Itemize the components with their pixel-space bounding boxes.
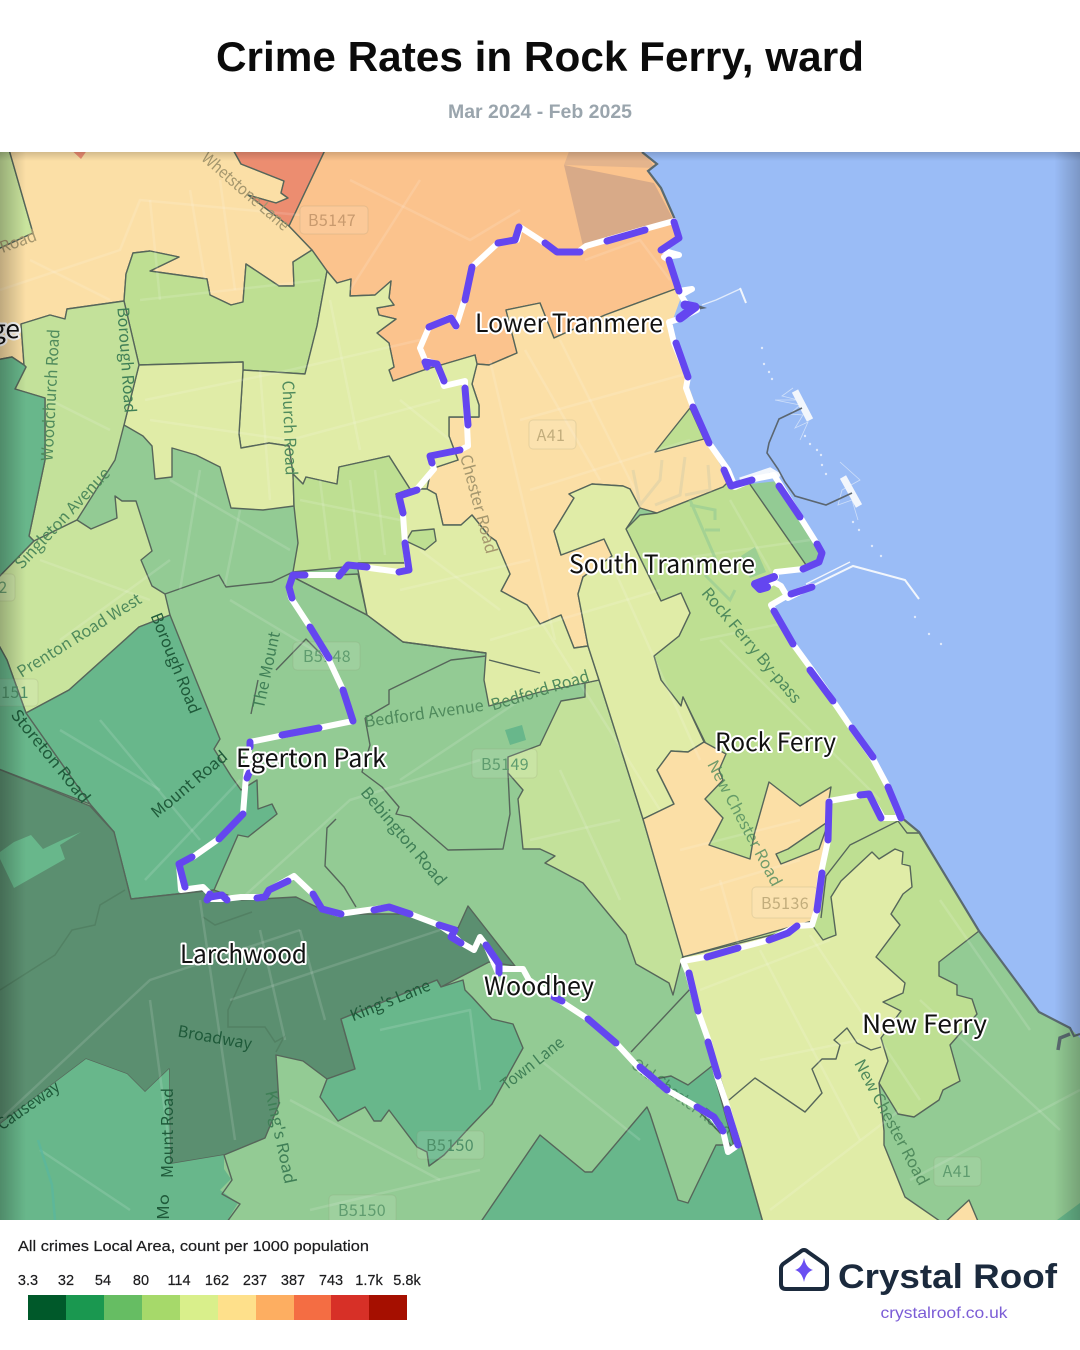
road names: Town Lane: [494, 1030, 568, 1095]
road names: New Chester Road: [849, 1054, 936, 1189]
legend scale values: 237: [243, 1273, 267, 1289]
road numbers: 151: [1, 679, 29, 703]
ward labels: Rock Ferry: [715, 723, 836, 759]
ward boundary: purple dashes: [179, 222, 901, 1145]
road names: Church Road: [277, 380, 305, 476]
legend scale values: 32: [58, 1273, 74, 1289]
legend: [18, 1239, 421, 1320]
boundary lines between similar areas: [165, 572, 919, 1226]
legend title: All crimes Local Area, count per 1000 population: [18, 1239, 369, 1255]
feature: teal dock lines: [690, 500, 735, 600]
road numbers: B5150: [426, 1132, 474, 1156]
legend scale values: 114: [167, 1273, 191, 1289]
legend scale values: 5.8k: [393, 1273, 421, 1289]
legend scale values: 743: [319, 1273, 343, 1289]
road names: New Chester Road: [702, 755, 789, 890]
ward boundary: white outline: [179, 221, 900, 1152]
ward labels: [0, 304, 987, 1041]
legend colour swatches: [28, 1295, 407, 1320]
legend scale values: 1.7k: [355, 1273, 383, 1289]
subtitle: date range: Mar 2024 - Feb 2025: [448, 102, 632, 123]
road names: Borough Road: [112, 306, 144, 414]
choropleth areas: [0, 146, 1080, 1226]
road numbers: A41: [537, 422, 565, 446]
road names: Old Chester Road: [627, 1051, 738, 1141]
title: Crime Rates in Rock Ferry, ward: [216, 33, 864, 80]
ward labels: South Tranmere: [569, 545, 755, 581]
feature: park square: [741, 547, 766, 578]
road names: Singleton Avenue: [8, 461, 115, 573]
coastline: [642, 152, 1080, 1050]
road names: Bedford Avenue: [363, 692, 485, 732]
ward labels: Woodhey: [484, 967, 594, 1003]
road names: Prenton Road West: [11, 586, 145, 682]
legend scale values: 54: [95, 1273, 111, 1289]
road numbers: B5147: [308, 207, 356, 231]
map edge shading: [0, 152, 1080, 1220]
road names: Mount Road: [145, 744, 232, 823]
road shields: [0, 206, 981, 1223]
road numbers: B5136: [761, 890, 809, 914]
road names: Borough Road: [146, 609, 208, 717]
legend scale values: 387: [281, 1273, 305, 1289]
road names: The Mount: [245, 629, 285, 710]
road names: Whetstone Lane: [197, 145, 296, 235]
road numbers: B5150: [338, 1197, 386, 1221]
ward labels: Egerton Park: [236, 739, 386, 775]
sea: [642, 146, 1080, 1038]
road names: King's Lane: [346, 972, 434, 1026]
street network: [0, 180, 1080, 1210]
legend scale values: [18, 1273, 421, 1289]
road names: King's Road: [260, 1088, 304, 1186]
pier head: [699, 305, 707, 310]
logo url: crystalroof.co.uk: [880, 1305, 1009, 1322]
ward labels: Larchwood: [180, 935, 307, 971]
road names: Chester Road: [455, 451, 505, 556]
marina walkway: [767, 408, 852, 505]
legend scale values: 80: [133, 1273, 149, 1289]
stream: [38, 1140, 55, 1220]
legend scale values: 3.3: [18, 1273, 38, 1289]
logo wordmark: Crystal Roof: [838, 1258, 1058, 1296]
legend scale values: 162: [205, 1273, 229, 1289]
icon: house with star: [781, 1250, 827, 1289]
docks and park features: [633, 457, 710, 505]
piers and marina: [702, 288, 919, 599]
road names: Bedford Road: [487, 663, 592, 715]
road names: Mount Road: [154, 1088, 178, 1178]
road names: Mo: [150, 1194, 174, 1220]
road numbers: [0, 207, 971, 1221]
ward labels: Lower Tranmere: [475, 304, 663, 340]
road names: Woodchurch Road: [34, 328, 64, 461]
road names: Bebington Road: [356, 781, 453, 890]
sea markers: [761, 347, 942, 645]
road numbers: A41: [943, 1158, 971, 1182]
faint interior boundaries in dark area: [0, 890, 284, 1052]
feature: pond: [505, 725, 526, 745]
logo: Crystal Roof: [781, 1250, 1058, 1322]
road numbers: B5149: [481, 751, 529, 775]
road numbers: B5148: [303, 643, 351, 667]
road names: Broadway: [176, 1018, 255, 1054]
ward labels: New Ferry: [862, 1005, 987, 1041]
map base: mid green areas: [56, 426, 1080, 1220]
road names: [0, 145, 936, 1220]
road names: Rock Ferry By-pass: [697, 581, 809, 708]
road names: Storeton Road: [6, 703, 97, 808]
